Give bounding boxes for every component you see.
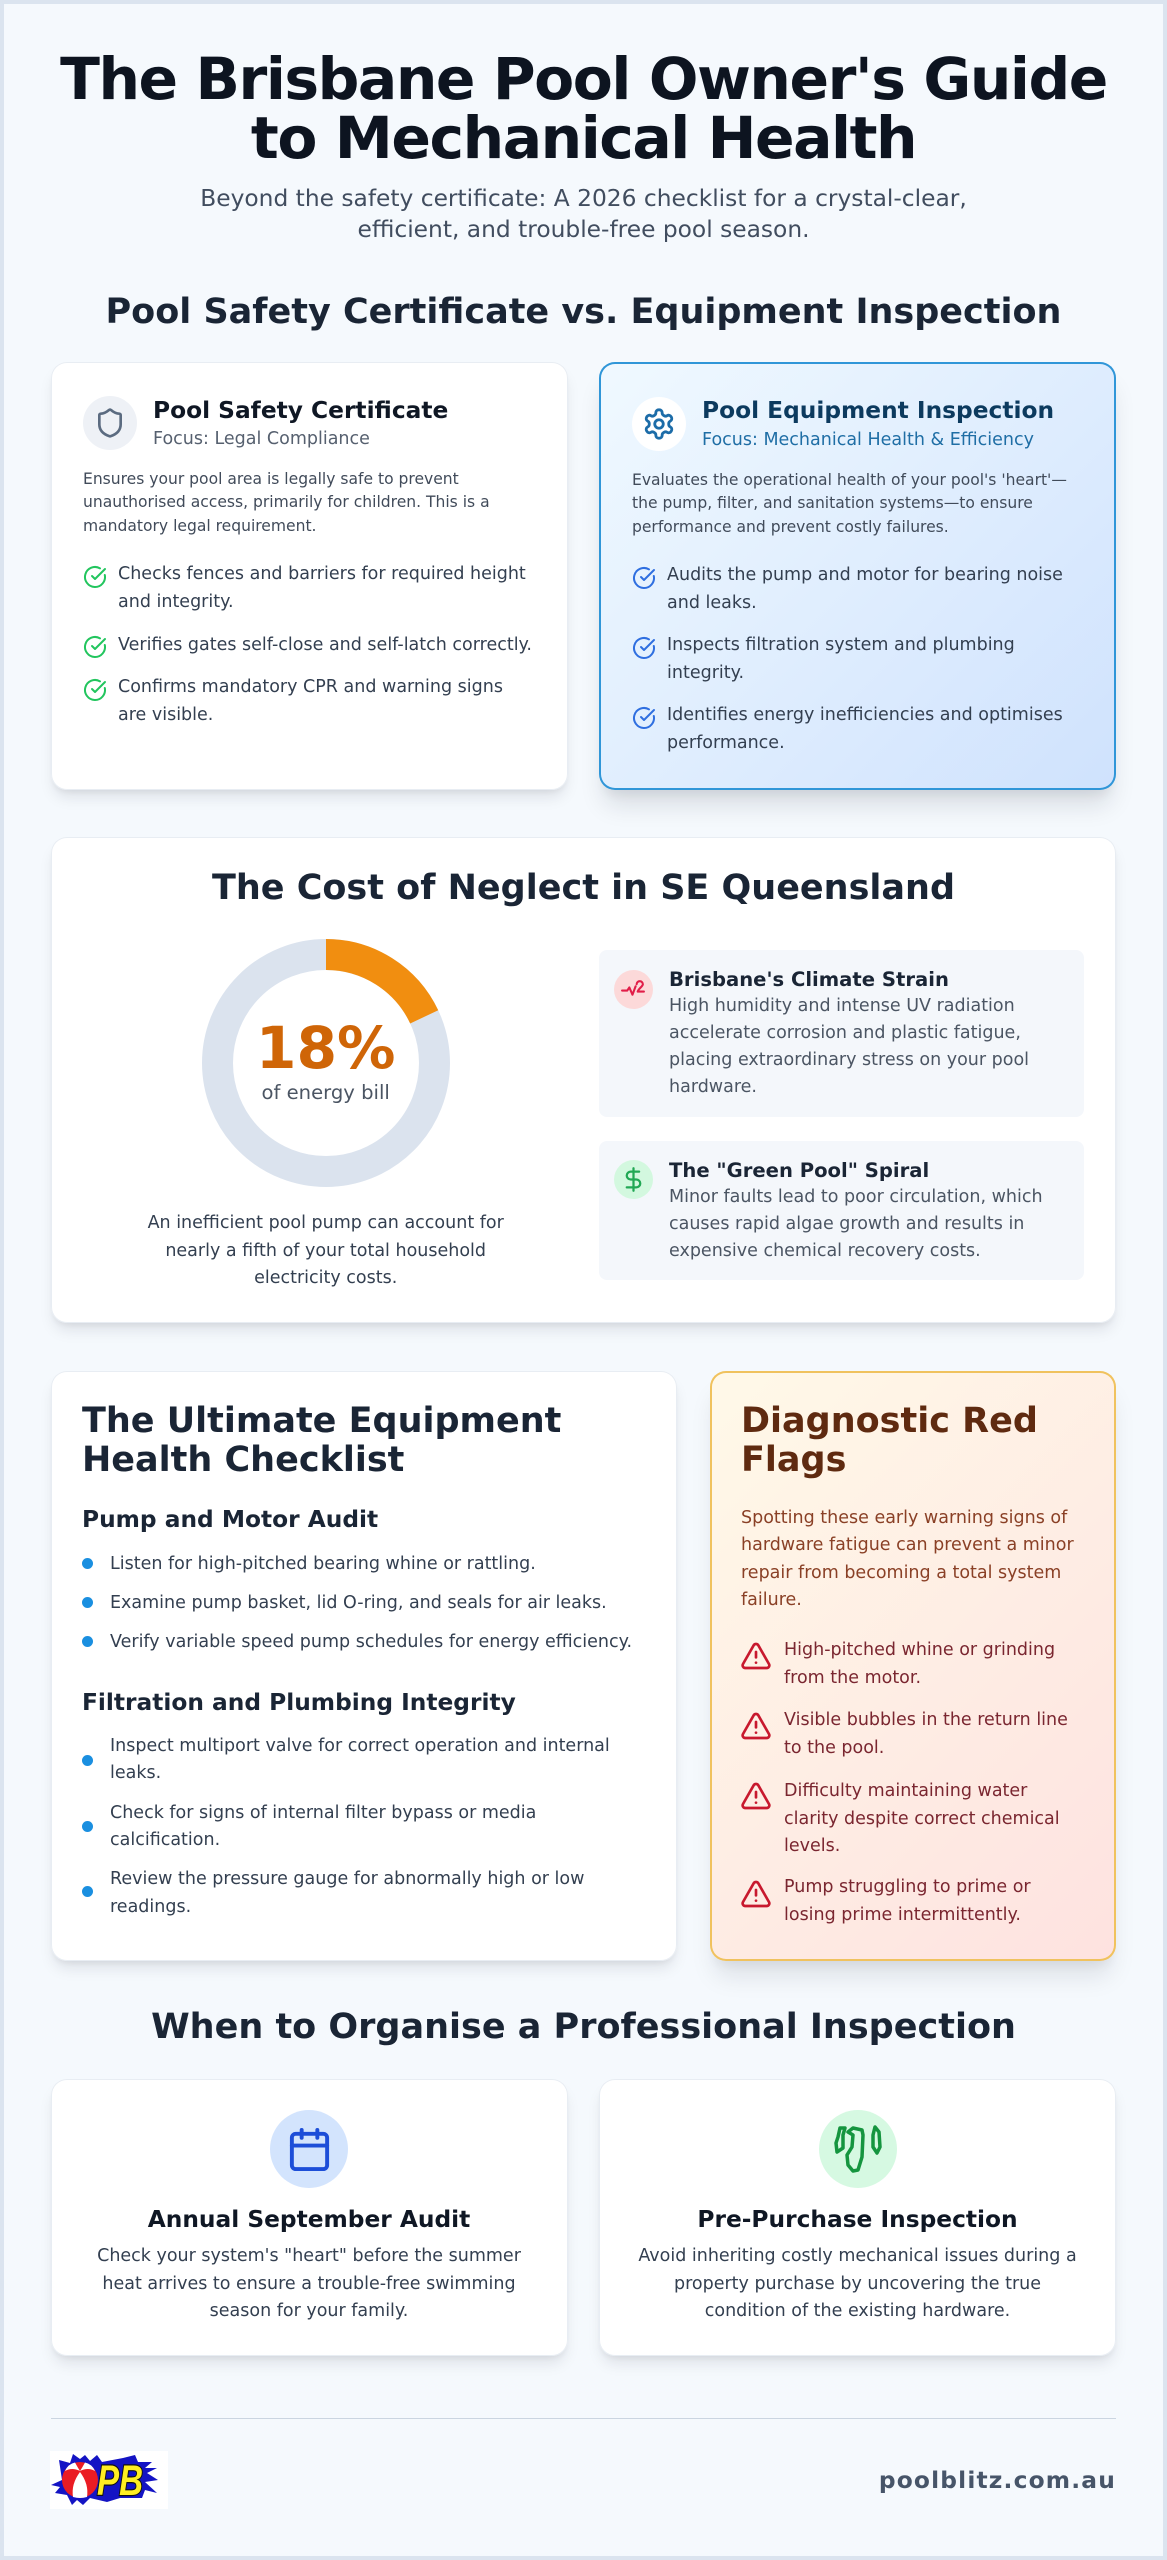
list item 4: leaks.	[110, 1763, 161, 1783]
icon: warning 1	[741, 1642, 771, 1670]
check icon 3	[84, 678, 106, 701]
card description	[83, 470, 490, 534]
check icon 2	[84, 636, 106, 658]
donut caption: electricity costs.	[254, 1268, 397, 1288]
checklist heading	[82, 1401, 561, 1480]
red flags description: failure.	[741, 1590, 802, 1610]
callout title: The "Green Pool" Spiral	[669, 1158, 929, 1182]
check item 3	[667, 705, 1063, 752]
check item 1: and integrity.	[118, 592, 234, 612]
subheading: filtration and plumbing: Filtration and Plumbing Integrity	[82, 1688, 516, 1716]
bullet 6	[82, 1886, 93, 1897]
check item 1: Audits the pump and motor for bearing noise	[667, 565, 1063, 585]
check item 1: Checks fences and barriers for required height	[118, 564, 526, 584]
bullet 4	[82, 1754, 93, 1766]
callout text	[669, 1187, 1043, 1261]
flag 2	[784, 1710, 1068, 1758]
donut chart: 18 percent	[202, 939, 450, 1187]
icon: warning 3	[741, 1782, 771, 1810]
card focus: Focus: Legal Compliance	[153, 429, 370, 449]
callout text: causes rapid algae growth and results in	[669, 1214, 1024, 1234]
flag 4	[784, 1877, 1031, 1924]
panel: pool equipment inspection	[599, 362, 1116, 790]
list item 5	[110, 1802, 536, 1850]
donut caption: An inefficient pool pump can account for	[148, 1213, 504, 1233]
flag 2: Visible bubbles in the return line	[784, 1710, 1068, 1730]
card description: Ensures your pool area is legally safe to prevent	[83, 470, 459, 488]
list item 6	[110, 1869, 584, 1916]
card title: Pre-Purchase Inspection	[697, 2206, 1018, 2232]
panel: equipment health checklist	[51, 1371, 677, 1961]
card text	[97, 2246, 521, 2321]
checklist heading: Health Checklist	[82, 1440, 404, 1480]
callout text	[669, 996, 1029, 1097]
check item 3: Confirms mandatory CPR and warning signs	[118, 677, 503, 697]
title	[60, 45, 1107, 172]
card title: Pool Safety Certificate	[153, 397, 448, 424]
subtitle: Beyond the safety certificate: A 2026 checklist for a crystal-clear,	[200, 184, 967, 212]
icon: pre-purchase	[819, 2110, 897, 2188]
subtitle	[200, 184, 967, 242]
check item 1	[118, 564, 526, 612]
callout text: expensive chemical recovery costs.	[669, 1241, 981, 1261]
red flags description: hardware fatigue can prevent a minor	[741, 1535, 1074, 1555]
card text: season for your family.	[210, 2301, 408, 2321]
list item 6: readings.	[110, 1896, 191, 1916]
callout text: placing extraordinary stress on your pool	[669, 1050, 1029, 1070]
card description: Evaluates the operational health of your pool's 'heart'—	[632, 470, 1067, 488]
card text: Avoid inheriting costly mechanical issues during a	[638, 2246, 1077, 2266]
red flags heading: Diagnostic Red	[741, 1401, 1038, 1441]
footer divider	[51, 2418, 1116, 2419]
callout text: High humidity and intense UV radiation	[669, 996, 1015, 1016]
flag 1: High-pitched whine or grinding	[784, 1640, 1055, 1660]
card title: Pool Equipment Inspection	[702, 397, 1054, 424]
check item 1	[667, 565, 1063, 612]
list item 5: Check for signs of internal filter bypass or media	[110, 1802, 536, 1822]
check item 3	[118, 677, 503, 724]
stat value: 18%	[256, 1014, 396, 1082]
check item 2	[667, 635, 1015, 682]
list item 4: Inspect multiport valve for correct operation and internal	[110, 1736, 610, 1756]
card title: Annual September Audit	[148, 2206, 470, 2232]
flag 3: Difficulty maintaining water	[784, 1781, 1027, 1801]
card description: mandatory legal requirement.	[83, 516, 316, 534]
card text: condition of the existing hardware.	[705, 2301, 1010, 2321]
check icon 3	[632, 706, 655, 729]
subheading: pump and motor: Pump and Motor Audit	[82, 1506, 378, 1532]
heading: certificate vs inspection: Pool Safety Certificate vs. Equipment Inspection	[106, 292, 1061, 332]
icon: dollar	[614, 1160, 653, 1199]
list item 4	[110, 1736, 610, 1783]
list item 6: Review the pressure gauge for abnormally high or low	[110, 1869, 584, 1889]
list item 1: Listen for high-pitched bearing whine or rattling.	[110, 1554, 536, 1574]
panel: annual september audit	[51, 2079, 568, 2356]
check item 3: are visible.	[118, 704, 213, 724]
check item 2: integrity.	[667, 662, 744, 682]
list item 2: Examine pump basket, lid O-ring, and seals for air leaks.	[110, 1592, 607, 1612]
icon: calendar	[270, 2110, 348, 2188]
callout: climate strain	[599, 950, 1084, 1117]
icon: warning 2	[741, 1712, 771, 1740]
logo	[50, 2451, 168, 2509]
icon: climate pulse	[614, 970, 653, 1009]
donut caption: nearly a fifth of your total household	[165, 1240, 486, 1260]
list item 3: Verify variable speed pump schedules for energy efficiency.	[110, 1632, 632, 1652]
callout title: Brisbane's Climate Strain	[669, 968, 949, 990]
icon: gear	[632, 397, 686, 451]
callout: green pool spiral	[599, 1141, 1084, 1280]
website url: poolblitz.com.au	[879, 2466, 1116, 2494]
heading: when to inspect: When to Organise a Professional Inspection	[151, 2006, 1016, 2046]
title: to Mechanical Health	[251, 104, 916, 172]
checklist heading: The Ultimate Equipment	[82, 1401, 561, 1441]
card text	[638, 2246, 1077, 2321]
flag 3: clarity despite correct chemical	[784, 1808, 1060, 1828]
stat label: of energy bill	[261, 1081, 390, 1104]
check item 3: Identifies energy inefficiencies and optimises	[667, 705, 1063, 725]
flag 2: to the pool.	[784, 1738, 884, 1758]
flag 1: from the motor.	[784, 1668, 921, 1688]
panel: cost of neglect	[51, 837, 1116, 1323]
card text: property purchase by uncovering the true	[674, 2274, 1041, 2294]
bullet 3	[82, 1636, 93, 1647]
card description: unauthorised access, primarily for children. This is a	[83, 493, 490, 511]
subtitle: efficient, and trouble-free pool season.	[357, 214, 810, 242]
logo: PB	[97, 2457, 143, 2505]
bullet 1	[82, 1558, 93, 1569]
red flags heading	[741, 1401, 1038, 1480]
check icon 1	[632, 566, 655, 589]
panel: pool safety certificate	[51, 362, 568, 790]
icon: shield	[83, 396, 137, 450]
check item 2: Verifies gates self-close and self-latch correctly.	[118, 635, 532, 655]
panel: pre-purchase inspection	[599, 2079, 1116, 2356]
flag 3	[784, 1781, 1060, 1856]
card focus: Focus: Mechanical Health & Efficiency	[702, 430, 1034, 450]
check icon 1	[84, 566, 106, 588]
check item 2: Inspects filtration system and plumbing	[667, 635, 1015, 655]
card description: the pump, filter, and sanitation systems—to ensure	[632, 494, 1033, 512]
flag 3: levels.	[784, 1836, 840, 1856]
donut caption	[148, 1213, 504, 1288]
heading: cost of neglect: The Cost of Neglect in SE Queensland	[212, 868, 955, 908]
red flags description: Spotting these early warning signs of	[741, 1508, 1067, 1528]
check icon 2	[632, 636, 655, 659]
card text: Check your system's "heart" before the summer	[97, 2246, 521, 2266]
panel: diagnostic red flags	[710, 1371, 1116, 1961]
check item 1: and leaks.	[667, 592, 757, 612]
bullet 5	[82, 1821, 93, 1832]
list item 5: calcification.	[110, 1830, 220, 1850]
bullet 2	[82, 1597, 93, 1608]
red flags heading: Flags	[741, 1440, 846, 1480]
callout text: hardware.	[669, 1077, 757, 1097]
flag 4: losing prime intermittently.	[784, 1904, 1021, 1924]
card text: heat arrives to ensure a trouble-free swimming	[102, 2274, 516, 2294]
callout text: Minor faults lead to poor circulation, which	[669, 1187, 1043, 1207]
red flags description: repair from becoming a total system	[741, 1562, 1061, 1582]
flag 4: Pump struggling to prime or	[784, 1877, 1031, 1897]
icon: warning 4	[741, 1880, 771, 1908]
callout text: accelerate corrosion and plastic fatigue,	[669, 1023, 1021, 1043]
flag 1	[784, 1640, 1055, 1688]
card description: performance and prevent costly failures.	[632, 518, 949, 536]
card description	[632, 470, 1067, 536]
title: The Brisbane Pool Owner's Guide	[60, 45, 1107, 113]
red flags description	[741, 1508, 1074, 1610]
check item 3: performance.	[667, 732, 785, 752]
